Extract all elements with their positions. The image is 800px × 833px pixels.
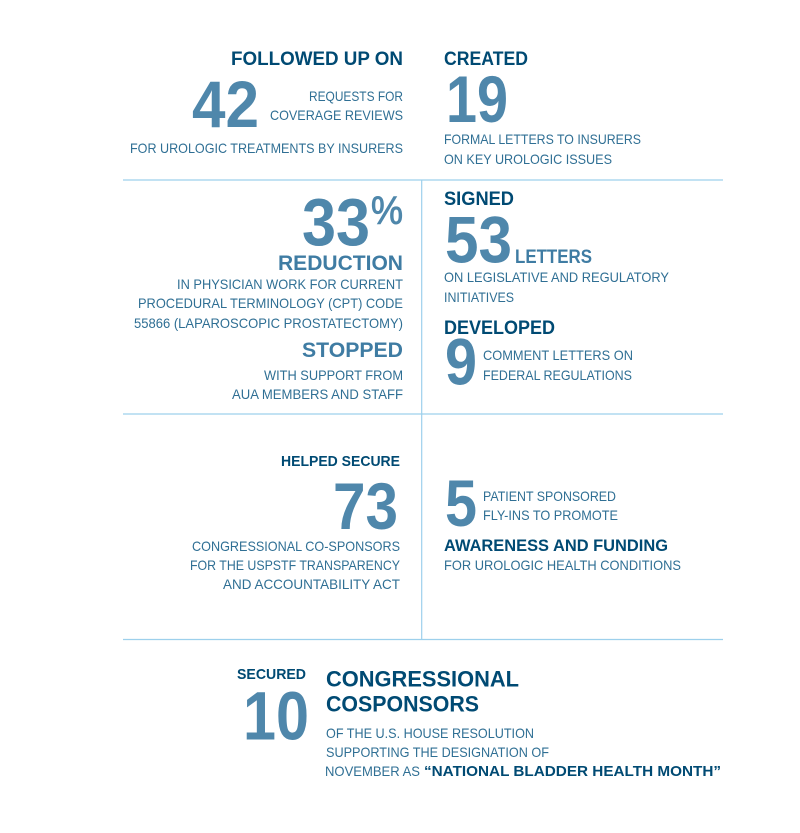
text: formal letters description	[444, 131, 641, 167]
text: co-sponsors description	[190, 538, 401, 592]
text: formal letters description: FORMAL LETTERS TO INSURERS	[444, 131, 641, 147]
text: legislative description: ON LEGISLATIVE AND REGULATORY	[444, 269, 670, 285]
text: co-sponsors description: AND ACCOUNTABILITY ACT	[223, 576, 400, 592]
text: house resolution description	[325, 725, 721, 780]
heading: signed: SIGNED	[444, 189, 514, 210]
number: 33 percent: %	[371, 190, 403, 233]
heading: followed up on: FOLLOWED UP ON	[231, 49, 403, 70]
text: comment letters description: FEDERAL REGULATIONS	[483, 367, 632, 383]
text: formal letters description: ON KEY UROLOGIC ISSUES	[444, 151, 612, 167]
number: 73: 73	[333, 469, 398, 543]
heading: congressional cosponsors: COSPONSORS	[326, 692, 479, 716]
text: co-sponsors description: CONGRESSIONAL CO-SPONSORS	[192, 538, 400, 554]
number: 53: 53	[445, 202, 512, 276]
text: house resolution description: “NATIONAL BLADDER HEALTH MONTH”	[424, 763, 721, 780]
text: reduction description: 55866 (LAPAROSCOPIC PROSTATECTOMY)	[134, 315, 403, 331]
text: reduction description: PROCEDURAL TERMINOLOGY (CPT) CODE	[138, 295, 403, 311]
number: 5: 5	[445, 466, 477, 540]
text: fly-ins description: PATIENT SPONSORED	[483, 488, 616, 504]
text: reduction description: IN PHYSICIAN WORK FOR CURRENT	[177, 276, 403, 292]
text: reduction description	[134, 276, 403, 331]
panel: 5 patient fly-ins	[444, 466, 681, 573]
heading: secured: SECURED	[237, 666, 306, 683]
text: co-sponsors description: FOR THE USPSTF TRANSPARENCY	[190, 557, 401, 573]
heading: reduction: REDUCTION	[278, 252, 403, 275]
panel: created 19 letters	[444, 49, 641, 167]
panel: helped secure 73	[190, 453, 401, 592]
text: legislative description	[444, 269, 670, 305]
number: 33 percent: 33	[302, 186, 370, 260]
text: comment letters description	[483, 347, 633, 383]
panel: secured 10 cosponsors	[237, 666, 721, 780]
heading: congressional cosponsors: CONGRESSIONAL	[326, 666, 519, 692]
text: fly-ins description	[483, 488, 618, 523]
panel: followed up on 42 requests	[130, 49, 403, 156]
text: requests description: FOR UROLOGIC TREATMENTS BY INSURERS	[130, 140, 403, 156]
panel: signed 53 letters	[444, 189, 670, 305]
text: comment letters description: COMMENT LETTERS ON	[483, 347, 633, 363]
text: house resolution description: NOVEMBER AS	[325, 763, 420, 779]
heading: developed: DEVELOPED	[444, 318, 555, 339]
number: 19: 19	[446, 62, 508, 136]
heading: created: CREATED	[444, 49, 528, 70]
number: 42: 42	[192, 67, 259, 141]
text: stopped description: WITH SUPPORT FROM	[264, 367, 403, 383]
text: requests description: COVERAGE REVIEWS	[270, 107, 403, 123]
panel: 33% reduction stopped	[134, 186, 403, 402]
text: stopped description: AUA MEMBERS AND STAFF	[232, 386, 403, 402]
text: requests description: REQUESTS FOR	[309, 88, 403, 104]
panel: developed 9 comment letters	[444, 318, 633, 398]
text: requests description	[130, 88, 403, 156]
heading: helped secure: HELPED SECURE	[281, 453, 400, 470]
text: legislative description: INITIATIVES	[444, 289, 514, 305]
number: 10: 10	[243, 678, 309, 754]
heading: stopped: STOPPED	[302, 339, 403, 362]
number: 9: 9	[445, 324, 477, 398]
text: house resolution description: SUPPORTING THE DESIGNATION OF	[326, 744, 549, 760]
label: letters: LETTERS	[515, 247, 592, 268]
text: house resolution description: OF THE U.S. HOUSE RESOLUTION	[326, 725, 534, 741]
text: urologic health conditions: FOR UROLOGIC HEALTH CONDITIONS	[444, 557, 681, 573]
heading: awareness and funding: AWARENESS AND FUNDING	[444, 536, 668, 555]
text: stopped description	[232, 367, 403, 402]
heading: congressional cosponsors	[326, 666, 519, 716]
text: fly-ins description: FLY-INS TO PROMOTE	[483, 507, 618, 523]
